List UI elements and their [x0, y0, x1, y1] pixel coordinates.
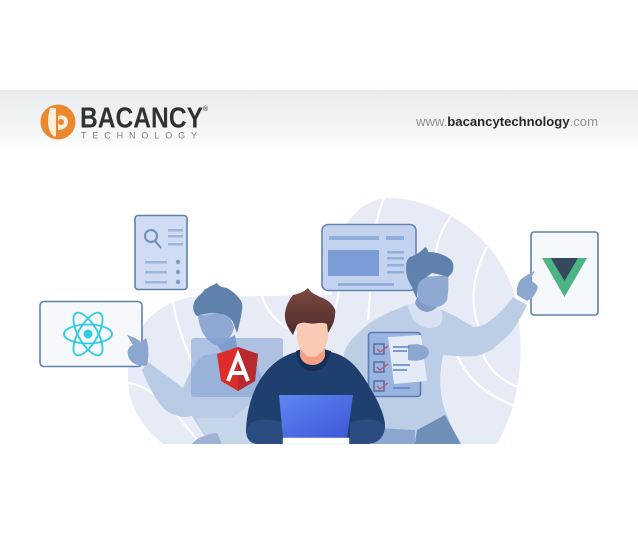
registered mark: ®	[203, 105, 209, 113]
face	[297, 318, 328, 357]
website url: www.bacancytechnology.com	[415, 114, 598, 129]
tagline: TECHNOLOGY	[81, 130, 197, 140]
lower shirt	[196, 395, 262, 444]
sweater shading	[246, 419, 385, 444]
logo	[40, 102, 209, 140]
hand	[517, 271, 538, 301]
illustration	[40, 198, 598, 444]
checklist panel	[368, 332, 420, 396]
paper and hand	[388, 335, 427, 384]
layout wireframe card	[322, 224, 416, 290]
vue card	[531, 232, 598, 315]
card lines	[145, 229, 183, 284]
icon: react logo	[64, 308, 112, 360]
header band	[0, 90, 638, 152]
central developer figure	[246, 288, 385, 444]
face	[418, 275, 448, 307]
face	[198, 313, 234, 345]
hair	[285, 288, 335, 335]
checklist rows	[374, 344, 410, 391]
hair	[406, 247, 453, 298]
neck	[300, 345, 325, 365]
hair	[193, 283, 242, 333]
left teammate figure	[127, 283, 283, 444]
icon: logo mark	[40, 104, 76, 140]
sweater	[246, 351, 385, 444]
search document card	[135, 216, 187, 290]
torso and arm	[344, 297, 527, 444]
laptop	[279, 395, 353, 444]
background blob	[128, 198, 521, 444]
collar	[407, 303, 442, 328]
neck	[415, 297, 437, 312]
collar	[296, 349, 331, 371]
pants	[415, 415, 461, 444]
icon: magnifier	[145, 230, 161, 248]
hand	[127, 335, 148, 366]
wordmark: BACANCY	[80, 102, 203, 134]
react card	[40, 302, 142, 366]
right teammate figure	[344, 247, 538, 444]
angular logo	[217, 347, 258, 391]
wireframe content	[328, 236, 404, 286]
neck	[217, 335, 238, 356]
pants	[192, 433, 222, 444]
icon: vue logo	[542, 258, 587, 297]
body and arm	[142, 350, 270, 444]
angular panel	[191, 338, 283, 397]
